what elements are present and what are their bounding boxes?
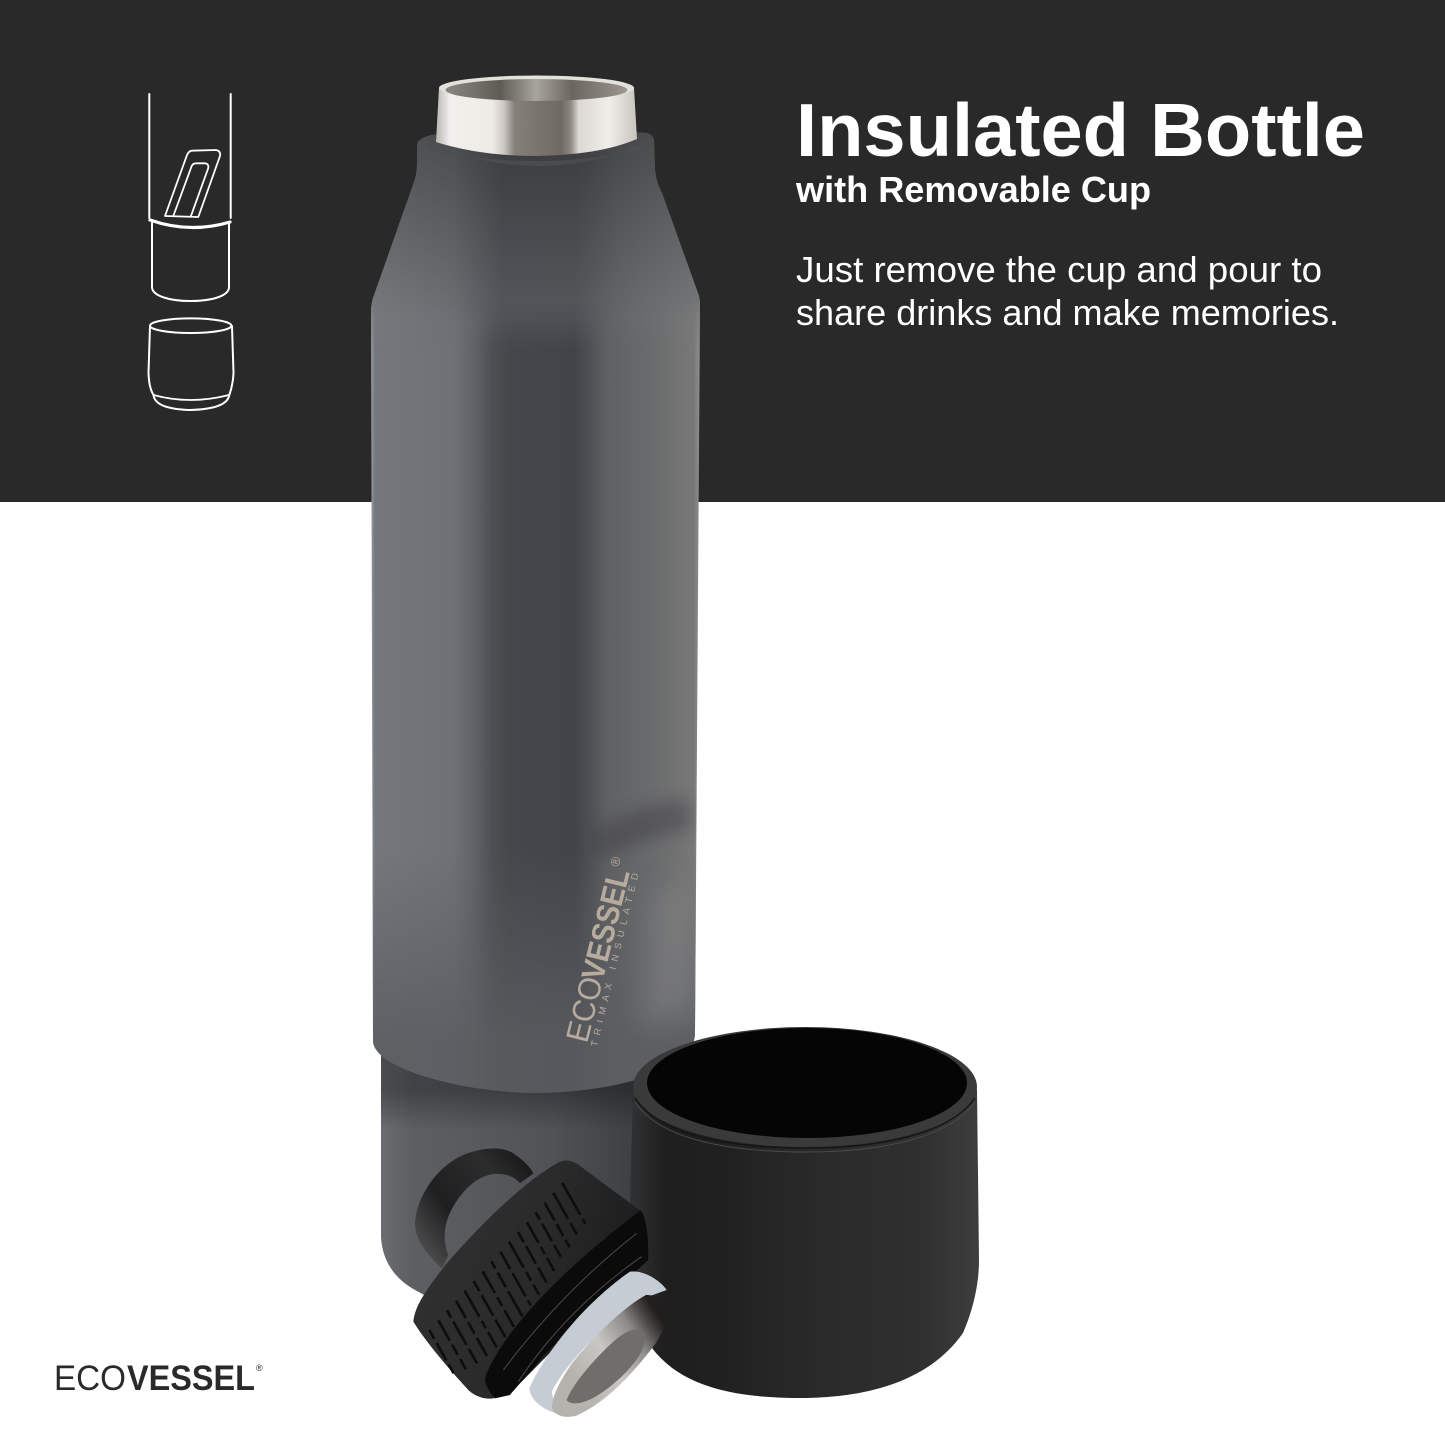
dark header band — [0, 0, 1445, 502]
cap steel face — [567, 1330, 645, 1403]
logo on bottle: ® — [607, 855, 624, 868]
cap handle — [415, 1149, 533, 1268]
threaded ring — [485, 1211, 648, 1398]
logo on bottle: VESSEL — [574, 865, 637, 984]
bottle lower section — [381, 1040, 690, 1320]
description text: share drinks and make memories. — [796, 292, 1339, 333]
logo on bottle: ECO — [559, 973, 610, 1046]
cap grip body — [413, 1161, 648, 1399]
grip texture — [429, 1183, 585, 1373]
description text — [796, 249, 1339, 333]
icon: bottle and removable cup line drawing — [148, 94, 234, 410]
gasket ring — [529, 1271, 667, 1413]
brand logo: ® — [256, 1363, 263, 1373]
bottle body — [360, 120, 710, 1100]
brand logo: VESSEL — [127, 1359, 255, 1398]
brand logo — [54, 1359, 263, 1398]
logo on bottle — [559, 854, 641, 1048]
brand logo: ECO — [54, 1359, 126, 1398]
cap steel plug — [552, 1295, 669, 1417]
title: Insulated Bottle — [796, 88, 1365, 172]
bottle cap with handle — [413, 1149, 669, 1417]
logo on bottle: TRIMAX INSULATED — [589, 872, 641, 1048]
steel collar — [424, 76, 648, 166]
removable cup — [630, 1027, 979, 1398]
description text: Just remove the cup and pour to — [796, 249, 1322, 290]
subtitle: with Removable Cup — [795, 169, 1151, 210]
